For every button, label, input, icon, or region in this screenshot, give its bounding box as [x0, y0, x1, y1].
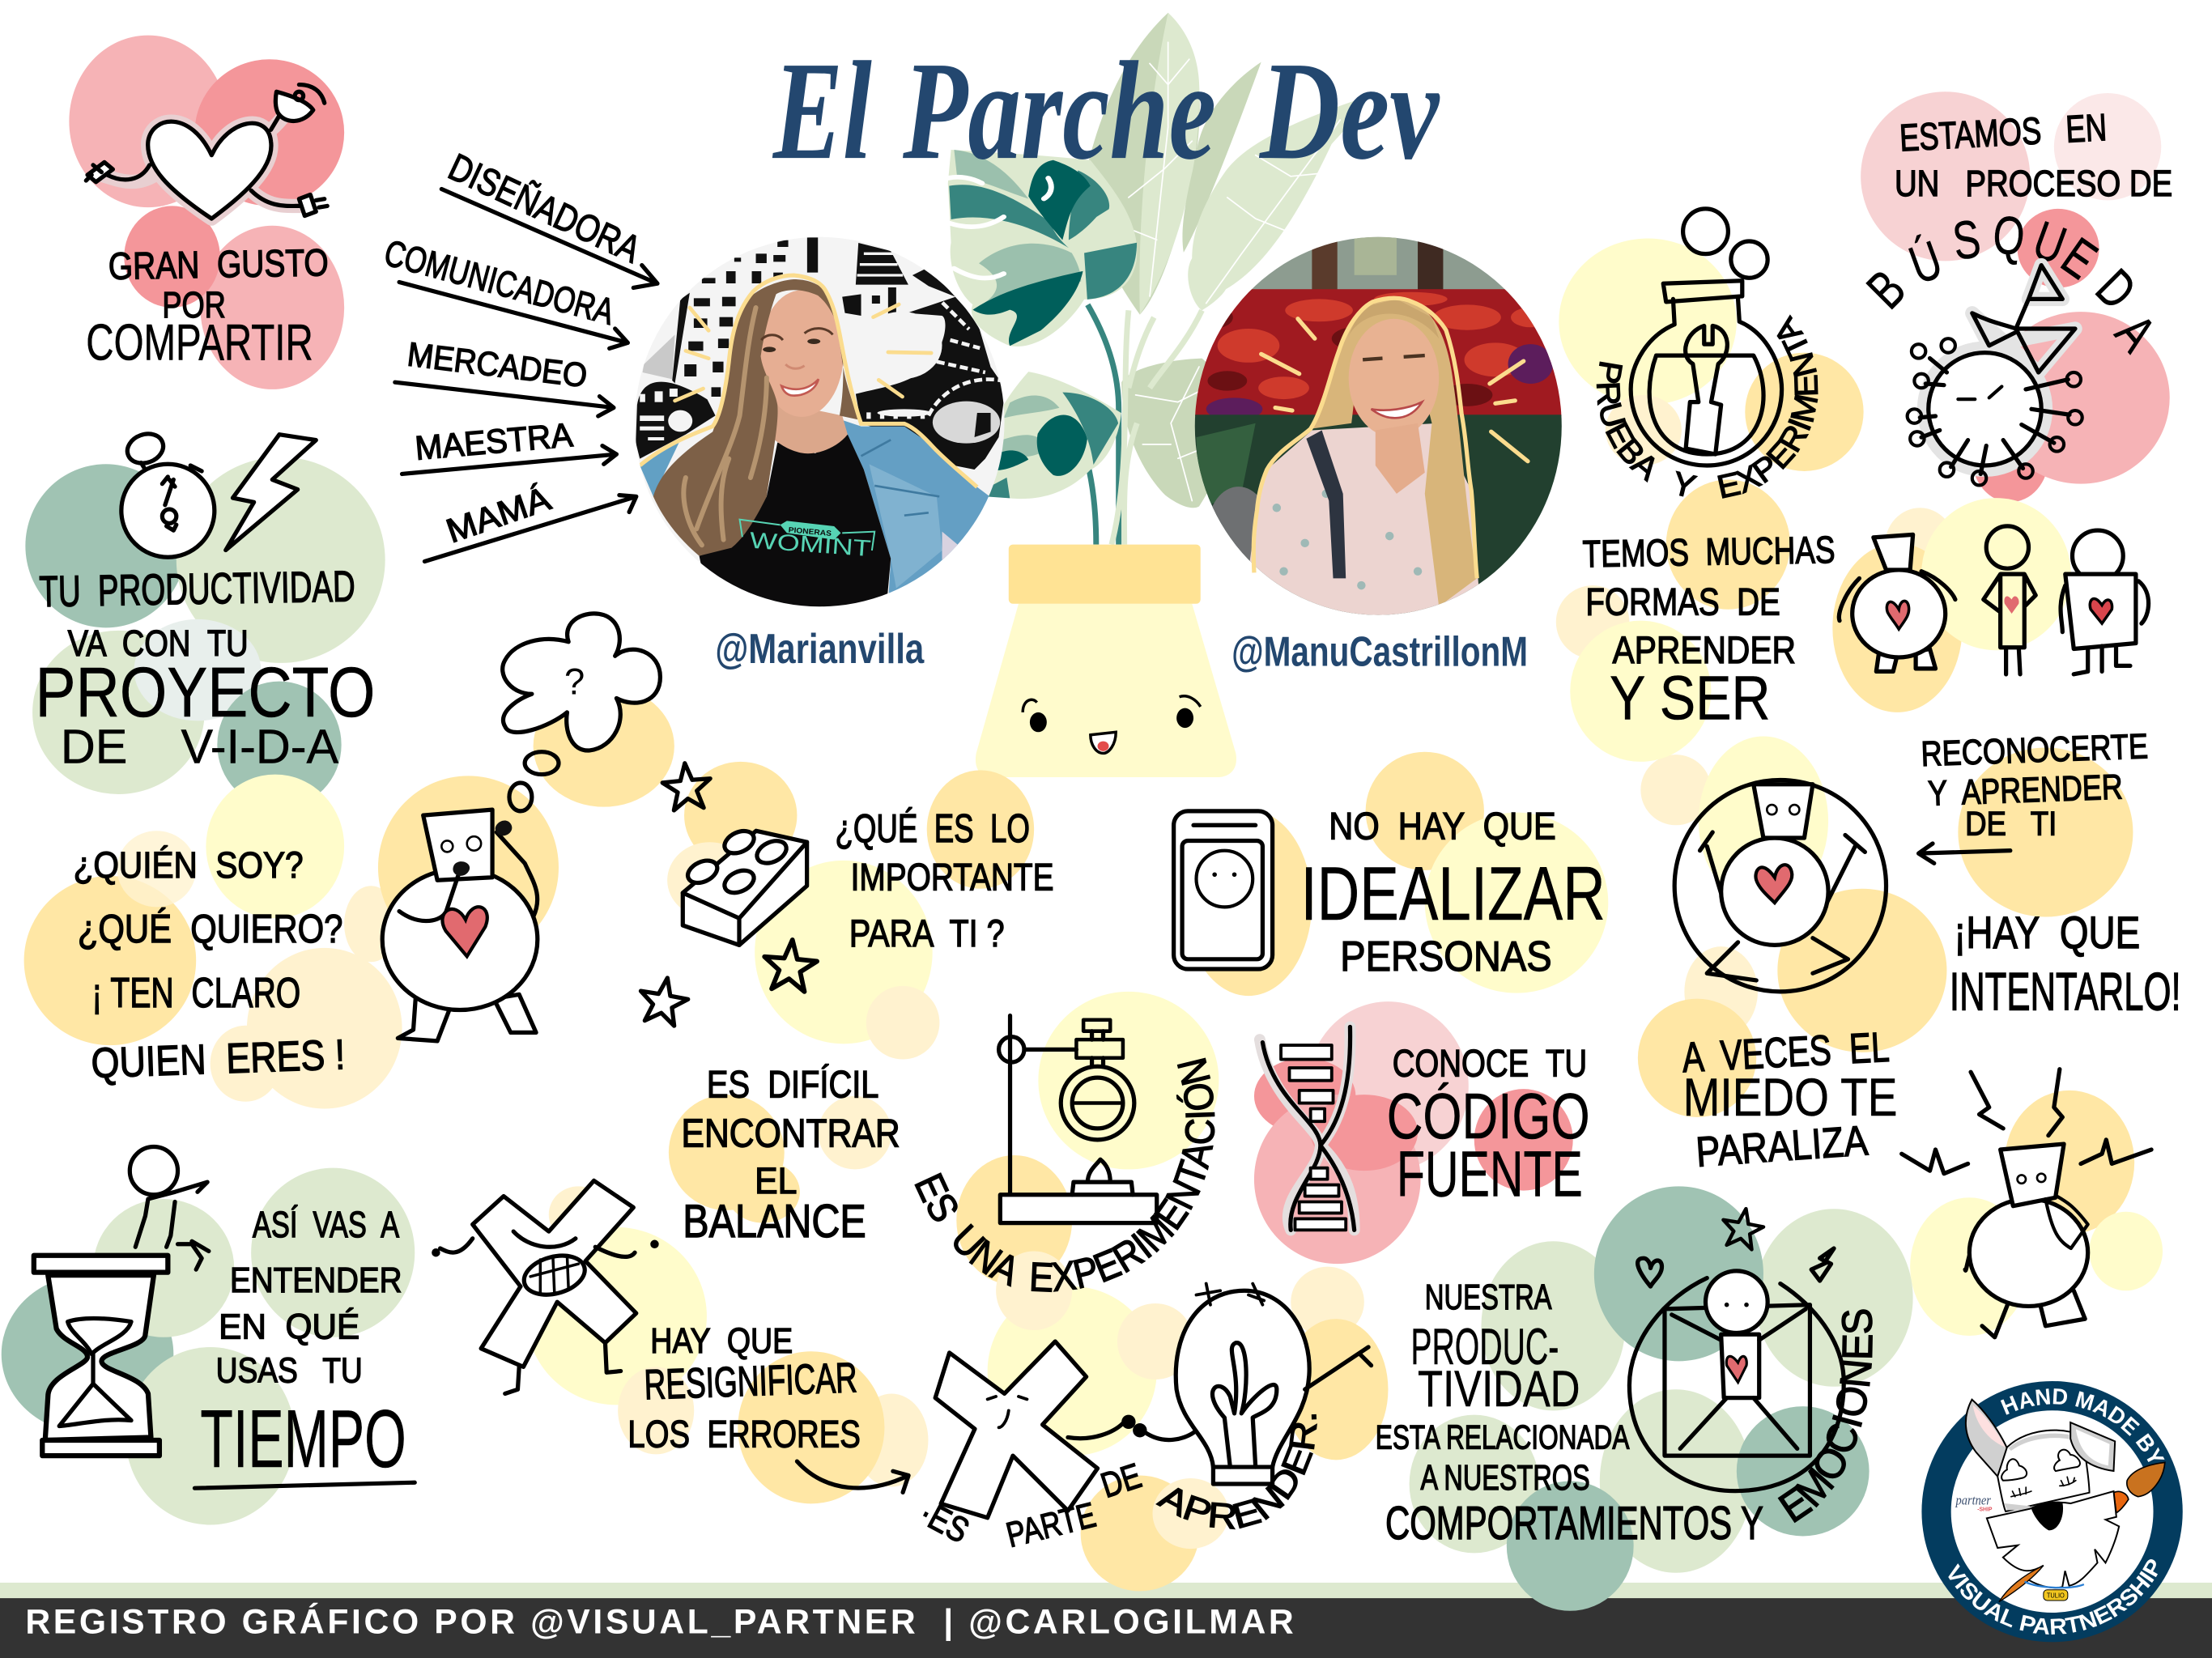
text: emociones arc: EMOCIONES: [1778, 1309, 1873, 1524]
panel: photo ManuCastrillonM: [1192, 233, 1566, 627]
icon: vitruvian figure: [1629, 1205, 1844, 1491]
text: idealizar: IDEALIZAR: [1300, 851, 1606, 936]
role: mercadeo: [395, 335, 614, 416]
icon: lego brick: [683, 827, 807, 945]
title: El: [772, 32, 872, 189]
title: [772, 32, 1440, 189]
text: busqueda arc: S: [1949, 209, 1984, 272]
icon: dog mascot: [1955, 1400, 2165, 1602]
icon: flask with wrench: [1631, 209, 1782, 466]
text: balance: ES DIFÍCIL: [707, 1063, 878, 1106]
handle: @ManuCastrillonM: @ManuCastrillonM: [1231, 628, 1528, 675]
icon: lightning bolt: [226, 435, 316, 551]
icon: heart with plugs: [86, 85, 327, 219]
text: es parte de: ·ES: [913, 1494, 975, 1551]
title: Dev: [1258, 32, 1440, 189]
text: tiempo: USAS TU: [216, 1352, 363, 1391]
text: busqueda arc: Q: [1991, 205, 2027, 267]
panel: plant and pot: [948, 13, 1368, 777]
role: mercadeo: MERCADEO: [406, 335, 589, 394]
text: tiempo: [194, 1204, 415, 1488]
text: resignificar: HAY QUE: [650, 1322, 793, 1361]
text: que es lo importante: IMPORTANTE: [851, 855, 1054, 898]
panel: no hay que idealizar personas: [1174, 752, 1608, 996]
panel: asi vas a entender tiempo: [2, 1147, 415, 1524]
text: resignificar: RESIGNIFICAR: [644, 1354, 858, 1409]
plant leaves: [1083, 13, 1368, 545]
shirt: [700, 435, 891, 618]
panel: conoce tu codigo fuente: [1254, 1001, 1590, 1264]
panel: photo Marianvilla: [635, 237, 1004, 607]
text: temos muchas formas: APRENDER: [1613, 628, 1796, 671]
text: codigo fuente: FUENTE: [1397, 1137, 1583, 1210]
text: preguntas: [74, 844, 346, 1087]
text: productividad comportamientos: PRODUC-: [1410, 1319, 1559, 1375]
neck and face: [775, 402, 848, 453]
panel: quien soy: [24, 775, 402, 1109]
text: preguntas: ¡ TEN CLARO: [91, 970, 300, 1017]
text: temos muchas formas: [1582, 528, 1836, 733]
text: idealizar: [1300, 805, 1606, 980]
text: gran gusto por compartir: POR: [162, 284, 226, 325]
text: tiempo: TIEMPO: [200, 1394, 406, 1485]
text: tiempo: EN QUÉ: [219, 1307, 359, 1347]
text: es parte de: [913, 1456, 1146, 1555]
panel: prueba y experimenta: [1559, 206, 1864, 499]
character: scared: [1902, 1069, 2151, 1337]
panel: estamos en un proceso de busqueda: [1856, 91, 2172, 502]
text: temos muchas formas: TEMOS MUCHAS: [1582, 528, 1836, 575]
text: productividad: PROYECTO: [36, 653, 375, 732]
hair: [653, 279, 858, 556]
text: miedo: MIEDO TE: [1683, 1068, 1897, 1128]
character: thin: [1984, 526, 2035, 674]
panel: three characters: [1832, 498, 2149, 712]
text: productividad comportamientos: COMPORTAMIENTOS Y: [1385, 1498, 1763, 1550]
text: gran gusto por compartir: GRAN GUSTO: [108, 240, 329, 287]
text: preguntas: QUIEN ERES !: [91, 1031, 346, 1087]
icon: thought cloud: [503, 614, 660, 811]
title: Parche: [902, 32, 1216, 189]
text: es parte de: PARTE: [1002, 1496, 1100, 1555]
text: resignificar: LOS ERRORES: [627, 1413, 861, 1456]
text: productividad comportamientos: TIVIDAD: [1418, 1361, 1580, 1418]
text: reconocerte: Y APRENDER: [1927, 768, 2123, 814]
text: reconocerte: DE TI: [1965, 804, 2057, 842]
text: busqueda arc: D: [2084, 258, 2147, 321]
text: balance: [682, 1063, 900, 1248]
text: es parte de: DE: [1096, 1456, 1146, 1506]
text: que es lo importante: PARA TI ?: [849, 912, 1005, 954]
yellow outline and rays: [640, 275, 977, 487]
text: gran gusto por compartir: [86, 240, 329, 371]
icon: light bulb: [1176, 1284, 1372, 1484]
icon: dog mascot: -SHIP: [1977, 1505, 1993, 1512]
role: maestra: [402, 415, 616, 474]
icon: lab stand: [999, 1016, 1157, 1223]
icon: character in circle: [1674, 780, 1887, 992]
panel: es dificil encontrar el balance: [669, 1063, 900, 1248]
text: balance: EL: [755, 1160, 797, 1201]
character: round: [1839, 534, 1955, 671]
monstera leaf top: [948, 150, 1137, 346]
panel: roles with arrows: [381, 145, 657, 561]
text: preguntas: ¿QUIÉN SOY?: [74, 844, 304, 886]
panel: gran gusto por compartir: [69, 36, 344, 389]
icon: thought cloud: ?: [564, 661, 585, 702]
role: comunicadora: COMUNICADORA: [381, 232, 619, 333]
badge: hand made by visual partnership: VISUAL PARTNERSHIP: [1948, 1559, 2158, 1635]
text: productividad: DE V-I-D-A: [61, 720, 339, 774]
role: diseñadora: DISEÑADORA: [442, 145, 648, 271]
badge: hand made by visual partnership: HAND MADE BY: [2000, 1388, 2165, 1462]
text: productividad comportamientos: NUESTRA: [1425, 1278, 1552, 1317]
text: productividad: [36, 562, 375, 774]
icon: dna helix: [1260, 1027, 1355, 1230]
building windows and mural: [636, 237, 1006, 470]
monstera leaf low: [972, 372, 1121, 499]
text: tiempo: ENTENDER: [230, 1261, 402, 1300]
text: prueba y experimenta arc: PRUEBA Y EXPERIMENTA: [1597, 314, 1819, 499]
text: busqueda arc: E: [2051, 227, 2108, 291]
text: aprender arc: APRENDER.: [1155, 1414, 1317, 1530]
text: productividad: TU PRODUCTIVIDAD: [39, 562, 355, 616]
panel: temos muchas formas de aprender y ser: [1556, 479, 1836, 762]
text: reconocerte: ¡HAY QUE: [1954, 908, 2140, 958]
text: gran gusto por compartir: COMPARTIR: [86, 314, 313, 371]
icon: virus with origami bird: [1908, 266, 2082, 485]
text: idealizar: PERSONAS: [1340, 933, 1552, 980]
panel: reconocerte y aprender: [1640, 727, 2181, 1052]
footer credit text: REGISTRO GRÁFICO POR @VISUAL_PARTNER | @CARLOGILMAR: [25, 1603, 1294, 1642]
text: busqueda arc: [1856, 205, 2167, 363]
text: miedo: A VECES EL: [1681, 1024, 1891, 1082]
character: square: [2061, 530, 2149, 674]
text: que es lo importante: [835, 807, 1054, 954]
badge: hand made by visual partnership: [1921, 1381, 2183, 1642]
jacket: [640, 440, 680, 496]
character: happy X: [935, 1341, 1195, 1518]
panel: que es lo importante: [636, 761, 1054, 1060]
character: angry X: [432, 1180, 659, 1393]
text: productividad comportamientos: A NUESTROS: [1421, 1459, 1590, 1498]
panel: es una experimentacion: [914, 991, 1219, 1330]
text: resignificar: [627, 1322, 861, 1456]
icon: hourglass with person: [34, 1147, 209, 1456]
arrow: to happy X: [797, 1461, 908, 1492]
text: que es lo importante: ¿QUÉ ES LO: [835, 807, 1030, 851]
text: productividad comportamientos: ESTA RELACIONADA: [1376, 1418, 1629, 1456]
text: preguntas: ¿QUÉ QUIERO?: [78, 908, 342, 951]
panel: hay que resignificar los errores: [432, 1180, 908, 1503]
text: estamos en un proceso de: ESTAMOS EN: [1899, 105, 2108, 159]
text: codigo fuente: CONOCE TU: [1393, 1041, 1587, 1084]
panel: productividad proyecto de vida: [25, 429, 385, 808]
text: busqueda arc: B: [1856, 259, 1917, 320]
panel: a veces el miedo te paraliza: [1638, 999, 2163, 1337]
text: productividad: VA CON TU: [68, 623, 249, 664]
text: es una experimentacion arc: ES UNA EXPERIMENTACIÓN: [914, 1057, 1214, 1292]
role: maestra: MAESTRA: [414, 415, 574, 467]
icon: dog mascot: partner: [1955, 1493, 1991, 1508]
text: balance: ENCONTRAR: [682, 1112, 900, 1156]
text: reconocerte: [1921, 727, 2181, 1022]
text: busqueda arc: U: [2026, 210, 2074, 276]
text: productividad comportamientos: [1376, 1278, 1763, 1550]
arrow: [1919, 844, 2010, 863]
WOMINT shirt logo: [738, 518, 876, 555]
handle: @Marianvilla: @Marianvilla: [715, 626, 925, 673]
icon: stopwatch: [121, 429, 215, 557]
text: idealizar: NO HAY QUE: [1329, 805, 1556, 848]
text: codigo fuente: [1387, 1041, 1590, 1210]
text: tiempo: ASÍ VAS A: [253, 1204, 400, 1245]
footer bar: [0, 1583, 2212, 1658]
WOMINT shirt logo: WOMINT: [749, 528, 872, 562]
role: mamá: MAMÁ: [441, 479, 555, 550]
panel: es parte de aprender: [823, 1234, 1388, 1592]
text: balance: BALANCE: [683, 1196, 866, 1248]
text: temos muchas formas: FORMAS DE: [1585, 580, 1780, 623]
icon: stars: [636, 761, 819, 1027]
role: mamá: [424, 479, 636, 561]
text: estamos en un proceso de: [1895, 105, 2172, 204]
text: miedo: PARALIZA: [1695, 1117, 1870, 1176]
icon: dog mascot: TULIO: [2047, 1592, 2065, 1600]
WOMINT shirt logo: PIONERAS: [788, 525, 832, 538]
character: thinker: [382, 810, 538, 1041]
panel: thinking character: [378, 614, 674, 1041]
text: reconocerte: RECONOCERTE: [1921, 727, 2149, 774]
text: miedo: [1681, 1024, 1897, 1176]
facial features: [761, 329, 833, 340]
text: codigo fuente: CÓDIGO: [1387, 1079, 1590, 1152]
icon: phone: [1174, 811, 1273, 969]
text: busqueda arc: A: [2104, 304, 2167, 363]
pot with face: [976, 545, 1236, 777]
panel: nuestra productividad emociones: [1376, 1186, 1913, 1611]
text: temos muchas formas: Y SER: [1610, 665, 1771, 733]
text: busqueda arc: Ú: [1902, 230, 1950, 295]
